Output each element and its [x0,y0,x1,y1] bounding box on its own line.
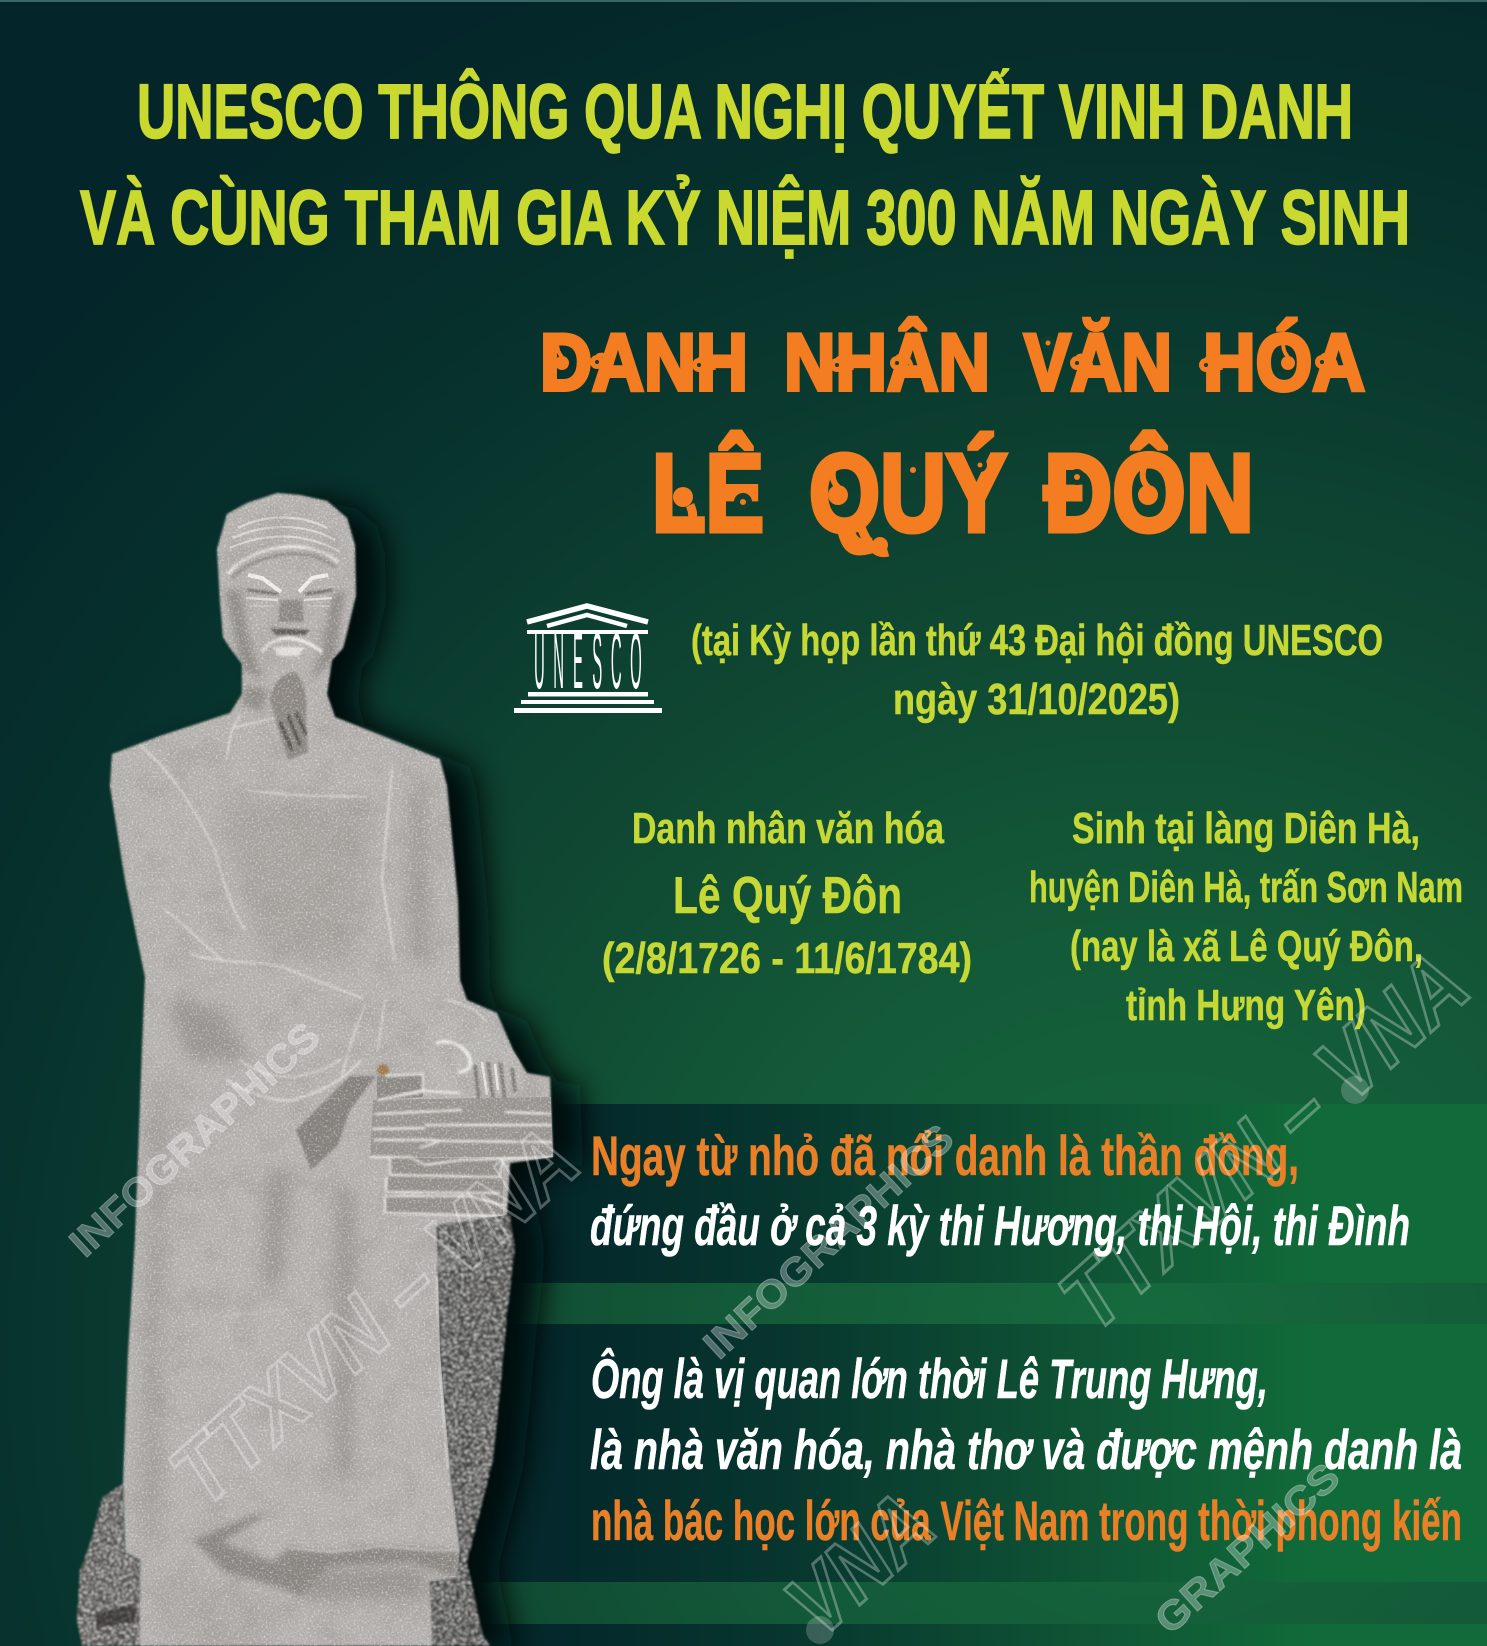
watermark: INFOGRAPHICS on statue: INFOGRAPHICS [61,1014,328,1266]
sleeve underside [296,1076,376,1170]
top edge strip [0,0,1487,2]
rust mark [377,1064,389,1076]
highlight folds [140,715,490,1552]
panel: first fact band [480,1104,1487,1283]
text: birthplace [1029,804,1463,1030]
head shading [225,590,345,712]
centre leg division [282,1590,286,1646]
turban [230,518,340,552]
heading line 1: VĂN [1024,318,1172,408]
watermark: INFOGRAPHICS centre: INFOGRAPHICS [695,1116,962,1368]
text: child prodigy fact [590,1124,1410,1257]
heading line 1: HÓA [1203,317,1365,408]
heading line 2 [652,432,1254,555]
text: name and dates: (2/8/1726 - 11/6/1784) [602,934,972,983]
mouth [272,647,305,656]
beard [270,672,308,760]
text: birthplace: tỉnh Hưng Yên) [1126,981,1366,1030]
books [370,1073,553,1216]
panel: bottom band [470,1624,1487,1646]
heading line 1: NHÂN [784,317,990,408]
statue: rock base [77,1215,515,1646]
surface mottling and grain [100,480,570,1646]
eyes [247,590,332,594]
statue: surface modelling [100,480,570,1646]
nose [278,600,304,622]
heading line 1: DANH [540,318,748,408]
heading ornaments: curls [555,336,1337,553]
heading line 2: ĐÔN [1044,432,1254,555]
heading line 2: LÊ [652,432,764,555]
watermark: GRAPHICS bottom: GRAPHICS [1147,1455,1348,1643]
text: name and dates: Danh nhân văn hóa [632,804,944,853]
text: name and dates: Lê Quý Đôn [673,867,902,925]
heading line 2: QUÝ [809,432,1007,555]
hand [434,1020,522,1098]
text: session note: ngày 31/10/2025) [893,675,1180,724]
face [246,575,332,656]
statue shadow [140,501,583,1646]
icon: UNESCO logo: UNESCO [534,617,642,706]
shaded folds [138,790,428,1646]
text: name and dates [602,804,972,983]
eyebrows [248,575,328,592]
heading: name [540,317,1365,555]
statue: body silhouette [110,493,553,1646]
text: career fact [590,1347,1462,1552]
hem shadow [192,1514,460,1596]
moustache [262,638,322,652]
icon: UNESCO logo [514,606,662,713]
statue of Lê Quý Đôn [77,480,570,1646]
text: session note [691,616,1383,724]
turban band edge [228,547,338,574]
heading line 1 [540,317,1365,408]
title [80,68,1410,261]
panel: second fact band [470,1324,1487,1582]
watermark: TTXVN VNA on statue: TTXVN – VNA [151,1109,597,1525]
